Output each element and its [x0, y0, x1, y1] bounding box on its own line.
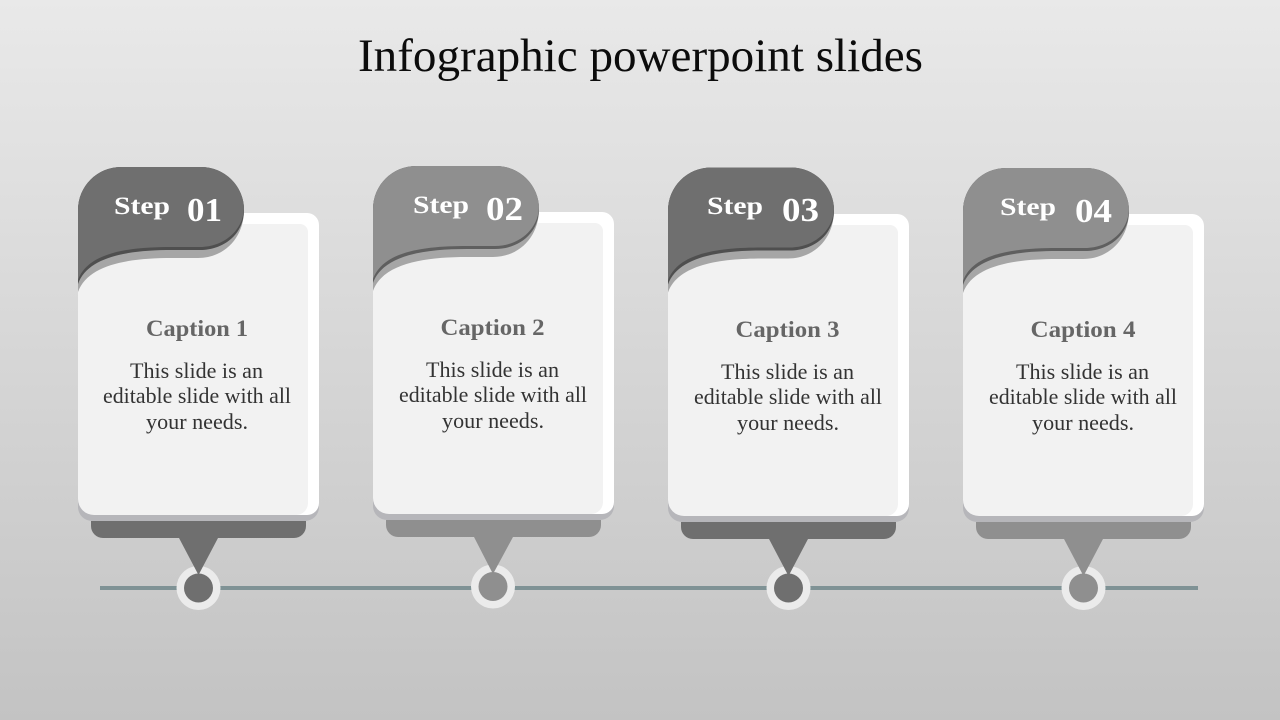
body text: [103, 358, 291, 434]
body text: editable slide with all: [103, 383, 291, 408]
timeline marker: [471, 564, 515, 608]
step label: Step: [707, 193, 763, 220]
step number: 03: [782, 192, 819, 229]
body text: [399, 357, 587, 433]
step tab: [78, 167, 244, 292]
body text: This slide is an: [1016, 359, 1149, 384]
pointer: [976, 522, 1191, 576]
caption: Caption 2: [440, 315, 544, 340]
step tab: [668, 167, 834, 292]
step label: Step: [413, 192, 469, 219]
step tab: [963, 168, 1129, 293]
step number: 04: [1075, 193, 1112, 230]
card body: [668, 214, 909, 522]
caption: Caption 1: [146, 316, 248, 341]
body text: This slide is an: [721, 359, 854, 384]
panel: step 04: [963, 168, 1204, 610]
timeline marker: [766, 566, 810, 610]
timeline marker: [1062, 566, 1106, 610]
body text: editable slide with all: [989, 384, 1177, 409]
timeline marker: [176, 566, 220, 610]
pointer: [681, 522, 896, 576]
caption: Caption 4: [1030, 317, 1136, 342]
title: Infographic powerpoint slides: [358, 30, 923, 82]
panel: step 03: [668, 167, 909, 610]
step number: 02: [486, 191, 523, 228]
step label: Step: [114, 193, 170, 220]
body text: editable slide with all: [694, 384, 882, 409]
body text: your needs.: [1032, 410, 1134, 435]
pointer: [386, 520, 601, 574]
body text: editable slide with all: [399, 382, 587, 407]
card body: [963, 214, 1204, 522]
caption: Caption 3: [736, 317, 840, 342]
pointer: [91, 521, 306, 575]
step label: Step: [1000, 194, 1056, 221]
step tab: [373, 166, 539, 291]
body text: your needs.: [737, 410, 839, 435]
body text: your needs.: [442, 408, 544, 433]
body text: [694, 359, 882, 435]
panel: step 02: [373, 166, 614, 608]
card body: [373, 212, 614, 520]
step number: 01: [187, 192, 222, 229]
body text: This slide is an: [426, 357, 559, 382]
panel: step 01: [78, 167, 319, 610]
body text: your needs.: [146, 409, 248, 434]
timeline line: [100, 586, 1198, 590]
body text: [989, 359, 1177, 435]
card body: [78, 213, 319, 521]
body text: This slide is an: [130, 358, 263, 383]
